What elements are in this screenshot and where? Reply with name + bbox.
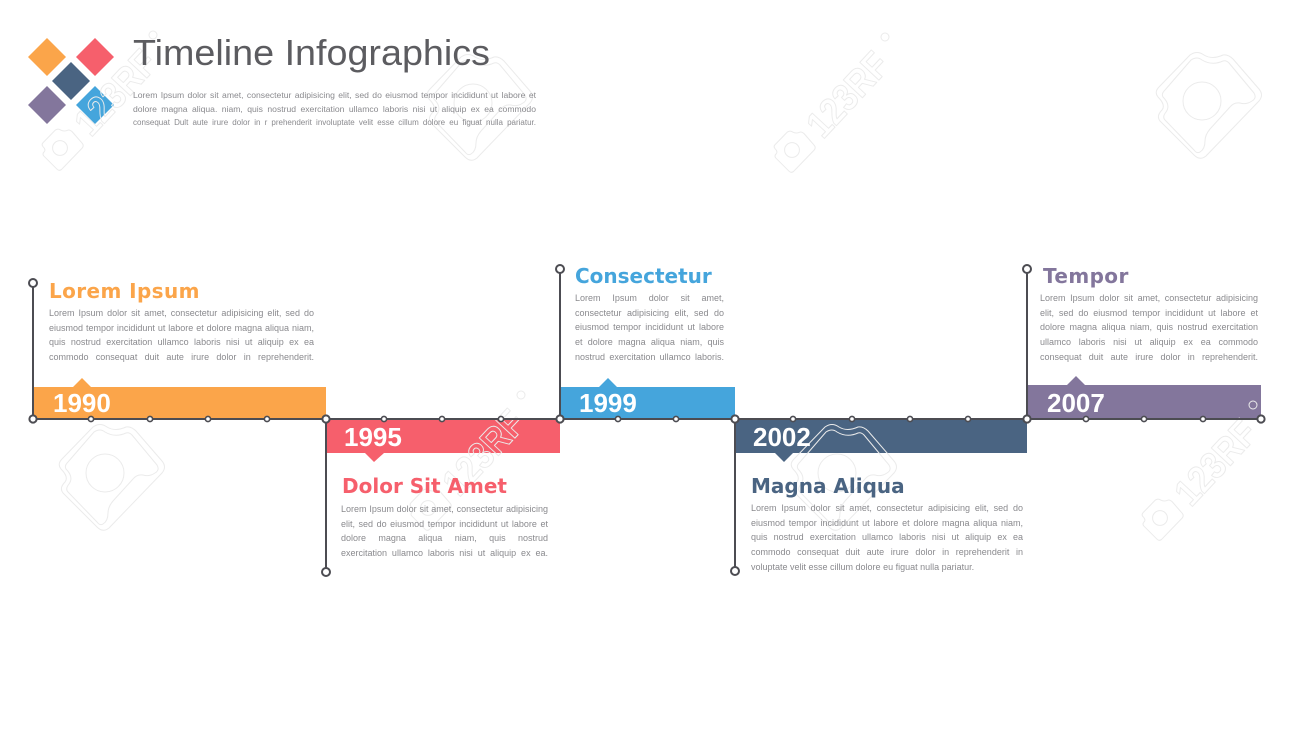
icon: logo diamonds [28, 38, 114, 124]
bar: 2002 navy [735, 419, 1027, 462]
text: Dolor Sit Amet: exercitation ullamco laboris nisi ut aliquip ex ea. [341, 548, 548, 558]
text: Lorem Ipsum: Lorem Ipsum dolor sit amet, consectetur adipisicing elit, sed do [49, 308, 314, 318]
text: Dolor Sit Amet: elit, sed do eiusmod tempor incididunt ut labore et [341, 519, 548, 529]
text: Tempor: elit, sed do eiusmod tempor incididunt ut labore et [1040, 308, 1258, 318]
timeline axis [29, 265, 1265, 576]
watermarks: 123RF [1167, 412, 1266, 514]
intro text: dolore magna aliqua. niam, quis nostrud exercitation ullamco laboris nisi ut aliquip ex ea commodo [133, 104, 536, 114]
text: Magna Aliqua: Lorem Ipsum dolor sit amet, consectetur adipisicing elit, sed do [751, 503, 1023, 513]
text: Consectetur: Lorem Ipsum dolor sit amet, [575, 293, 724, 303]
text: Magna Aliqua: quis nostrud exercitation ullamco laboris nisi ut aliquip ex ea [751, 532, 1023, 542]
text: Magna Aliqua: commodo consequat duit aute irure dolor in reprehenderit in [751, 547, 1023, 557]
text: Tempor [1040, 293, 1258, 362]
text: Tempor: ullamco laboris nisi ut aliquip ex ea commodo [1040, 337, 1258, 347]
year: 1995: 1995 [344, 422, 402, 452]
intro text: Lorem Ipsum dolor sit amet, consectetur adipisicing elit, sed do eiusmod tempor incididunt ut labore et [133, 90, 536, 100]
text: Dolor Sit Amet: Lorem Ipsum dolor sit amet, consectetur adipisicing [341, 504, 548, 514]
year: 1990: 1990 [53, 388, 111, 418]
intro text [133, 90, 536, 127]
bar: 1990 orange [33, 378, 326, 419]
text: Magna Aliqua: voluptate velit esse cillum dolore eu figuat nulla pariatur. [751, 562, 974, 572]
text: Consectetur [575, 293, 724, 362]
heading: Tempor: Tempor [1043, 264, 1129, 288]
text: Dolor Sit Amet: dolore magna aliqua niam, quis nostrud [341, 533, 548, 543]
text: Tempor: consequat duit aute irure dolor in reprehenderit. [1040, 352, 1258, 362]
text: Consectetur: eiusmod tempor incididunt ut labore [575, 322, 724, 332]
bar: 1995 red [326, 419, 560, 462]
heading: Consectetur: Consectetur [575, 264, 712, 288]
year: 1999: 1999 [579, 388, 637, 418]
text: Magna Aliqua: eiusmod tempor incididunt ut labore et dolore magna aliqua niam, [751, 518, 1023, 528]
heading: Lorem Ipsum: Lorem Ipsum [49, 279, 200, 303]
watermarks [42, 31, 1266, 540]
text: Tempor: Lorem Ipsum dolor sit amet, consectetur adipisicing [1040, 293, 1258, 303]
heading: Magna Aliqua: Magna Aliqua [751, 474, 905, 498]
heading: Dolor Sit Amet: Dolor Sit Amet [342, 474, 507, 498]
bar: 1999 blue [560, 378, 735, 419]
text: Lorem Ipsum: eiusmod tempor incididunt ut labore et dolore magna aliqua niam, [49, 323, 314, 333]
watermarks: 123RF [435, 402, 534, 504]
watermarks: 123RF [799, 44, 898, 146]
intro text: consequat Dult aute irure dolor in r prehenderit involuptate velit esse cillum dolore eu figuat nulla pariatur. [133, 118, 536, 127]
title: Timeline Infographics [133, 32, 490, 73]
text: Lorem Ipsum: commodo consequat duit aute irure dolor in reprehenderit. [49, 352, 314, 362]
text: Tempor: dolore magna aliqua niam, quis nostrud exercitation [1040, 322, 1258, 332]
year: 2002: 2002 [753, 422, 811, 452]
text: Consectetur: consectetur adipisicing elit, sed do [575, 308, 724, 318]
text: Consectetur: nostrud exercitation ullamco laboris. [575, 352, 724, 362]
watermarks: 123RF [67, 42, 166, 144]
text: Consectetur: et dolore magna aliqua niam, quis [575, 337, 724, 347]
text: Magna Aliqua [751, 503, 1023, 572]
text: Lorem Ipsum: quis nostrud exercitation ullamco laboris nisi ut aliquip ex ea [49, 337, 314, 347]
bar: 2007 purple [1027, 376, 1261, 419]
text: Dolor Sit Amet [341, 504, 548, 558]
year: 2007: 2007 [1047, 388, 1105, 418]
text: Lorem Ipsum [49, 308, 314, 362]
